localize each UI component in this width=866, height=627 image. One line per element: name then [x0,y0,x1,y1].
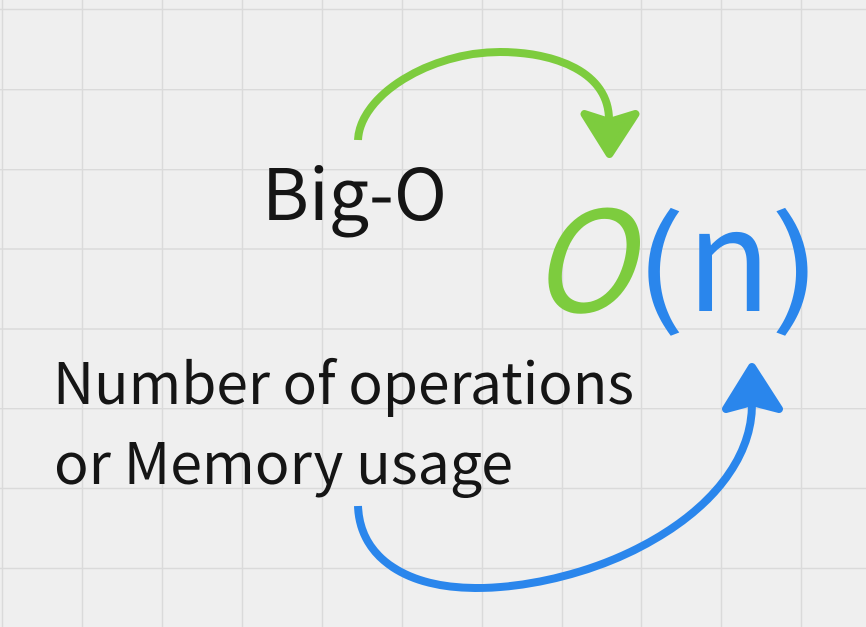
heading: Big-O label: Big-O [262,139,447,241]
text block: number of operations or memory usage: or Memory usage [54,419,513,501]
formula: O(n) notation: ) [770,166,822,348]
formula: O(n) notation: O [530,150,646,353]
arrow: blue curve from operations label to n [358,367,779,588]
formula: O(n) notation [530,147,822,353]
formula: O(n) notation: n [686,147,771,352]
text block: number of operations or memory usage [53,339,634,501]
formula: O(n) notation: ( [634,166,686,348]
arrow: green curve from Big-O label to the O symbol [358,52,636,154]
text block: number of operations or memory usage: Number of operations [53,339,634,421]
